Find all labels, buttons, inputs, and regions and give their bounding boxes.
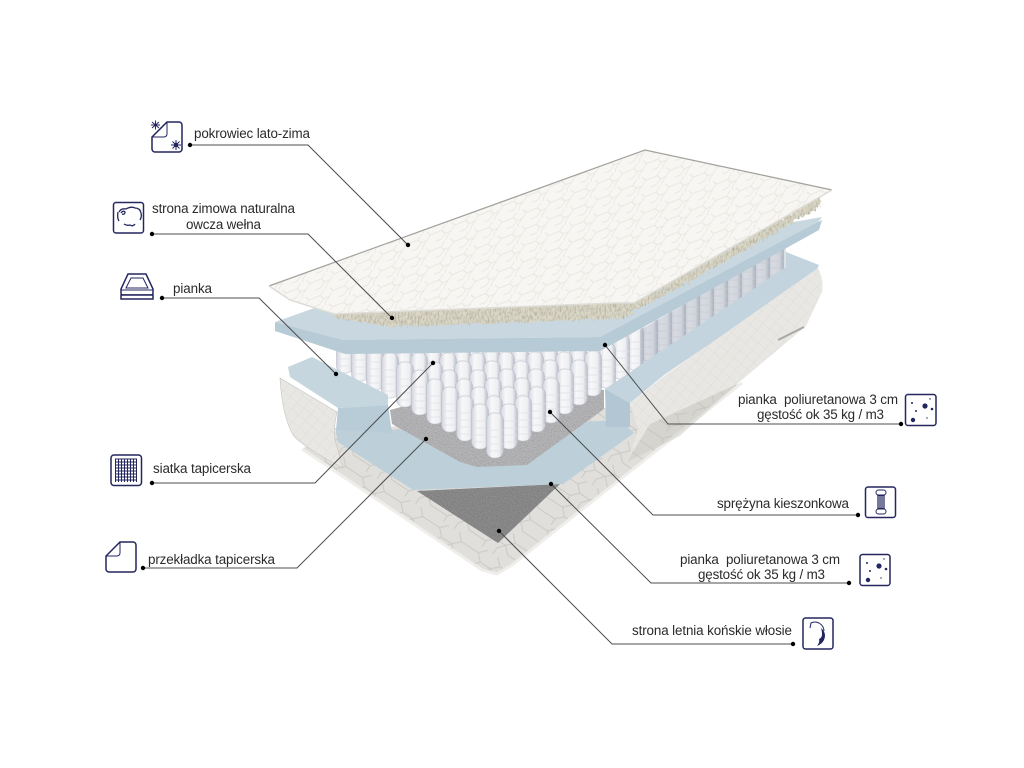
leader: strona zimowa (150, 232, 394, 320)
leader: siatka (150, 361, 435, 485)
left side cover curl (280, 378, 343, 468)
label: pokrowiec lato-zima: pokrowiec lato-zima (194, 126, 311, 141)
label: strona zimowa naturalna owcza welna (152, 201, 296, 232)
right side cover (627, 268, 822, 460)
right lower foam ring (605, 252, 819, 427)
icon: sheep wool (114, 202, 144, 233)
quilted top cover (269, 150, 832, 314)
bottom cover layer (302, 383, 742, 574)
shadow strip under mattress (778, 327, 804, 340)
left lower foam block (288, 357, 392, 433)
leader: pianka gorna (603, 343, 903, 426)
label: przekladka tapicerska: przekładka tapicerska (148, 552, 276, 567)
upper foam layer (275, 217, 822, 354)
label: pianka poliuretanowa gorna (738, 392, 898, 422)
label: strona letnia konskie wlosie: strona letnia końskie włosie (632, 623, 792, 638)
label: pianka poliuretanowa dolna: gęstość ok 35 kg / m3 (698, 567, 825, 582)
leader: pianka dolna (549, 482, 851, 585)
icon: horse (803, 618, 833, 649)
label: sprezyna kieszonkowa: sprężyna kieszonkowa (717, 496, 850, 511)
mattress illustration (269, 150, 832, 574)
label: pianka poliuretanowa dolna (680, 552, 840, 582)
label: strona zimowa naturalna owcza welna: strona zimowa naturalna (152, 201, 296, 216)
leader: pianka (160, 296, 338, 376)
label: siatka tapicerska: siatka tapicerska (153, 461, 252, 476)
pocket springs (336, 237, 784, 458)
natural wool layer (334, 196, 820, 327)
label: pianka: pianka (173, 281, 213, 296)
icon: foam tray (121, 274, 153, 299)
leader: sprezyna (548, 410, 860, 517)
leader lines (141, 143, 903, 646)
label: pianka poliuretanowa gorna: pianka poliuretanowa 3 cm (738, 392, 898, 407)
leader: pokrowiec (188, 143, 410, 247)
label: strona zimowa naturalna owcza welna: owcza wełna (186, 217, 262, 232)
icon: grid mesh (111, 455, 142, 486)
leader: strona letnia (497, 529, 795, 646)
icon: pocket spring (866, 487, 896, 518)
icon: foam dots upper (906, 394, 936, 426)
icon: foam dots lower (860, 554, 890, 586)
rear springs shading (640, 246, 786, 372)
light felt spacer (390, 380, 604, 467)
label: pianka poliuretanowa dolna: pianka poliuretanowa 3 cm (680, 552, 840, 567)
icon: cover summer winter (151, 120, 182, 152)
leader: przekladka (141, 437, 428, 570)
dark felt summer side (417, 484, 560, 543)
lower foam slab (335, 420, 634, 490)
label: pianka poliuretanowa gorna: gęstość ok 35 kg / m3 (757, 407, 884, 422)
icon: sheet (106, 542, 136, 572)
